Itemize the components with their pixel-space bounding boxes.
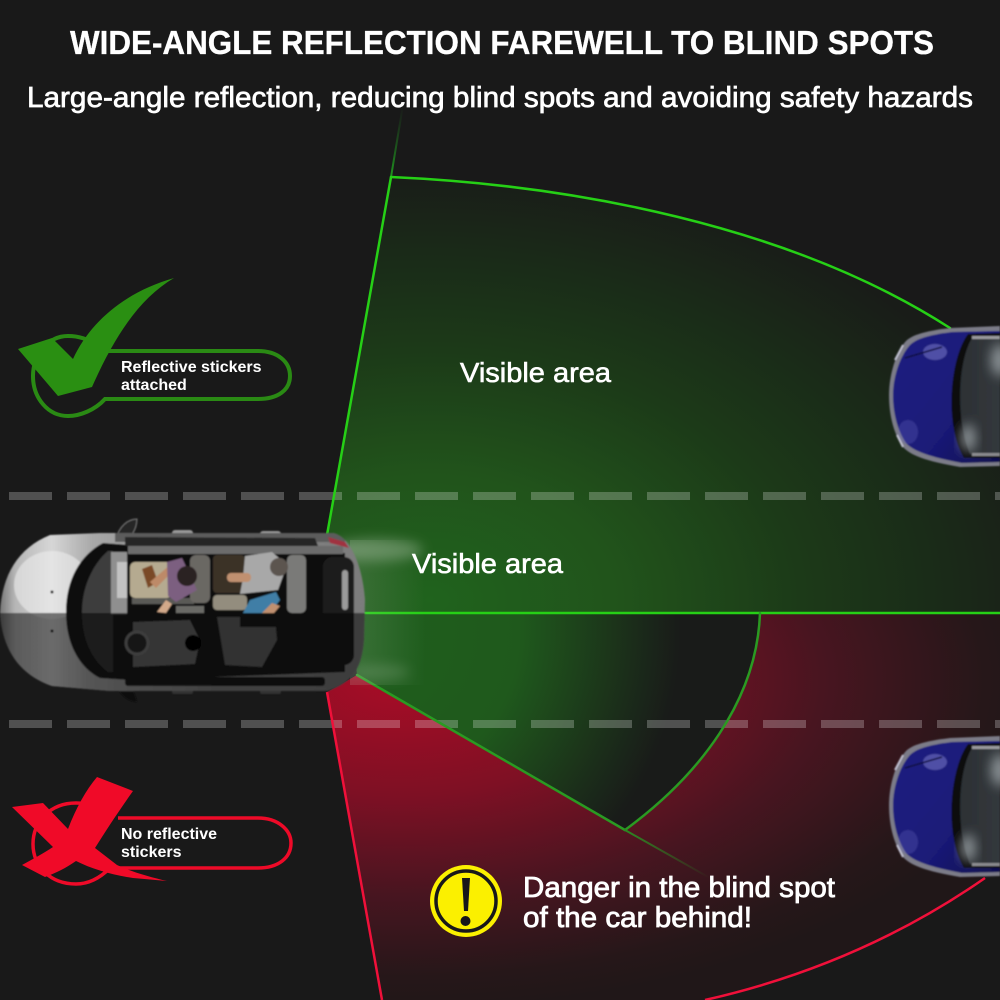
lower half figures [133, 620, 200, 667]
blind spot: red sector [327, 613, 1000, 1000]
blue car, upper right [889, 326, 1000, 467]
danger message: of the car behind! [523, 902, 752, 934]
front seat and passenger [130, 562, 172, 598]
danger message [523, 872, 835, 934]
subtitle: Large-angle reflection, reducing blind spots and avoiding safety hazards [27, 82, 973, 114]
rear window [323, 557, 354, 665]
badge label: attached [121, 377, 187, 394]
pill outline [33, 336, 290, 416]
pill outline [33, 803, 291, 884]
title: WIDE-ANGLE REFLECTION FAREWELL TO BLIND SPOTS [70, 24, 934, 61]
headlight glow behind the car [327, 539, 425, 685]
car mirrors [115, 519, 281, 702]
icon: green check mark [18, 278, 174, 396]
blue car, lower right [889, 736, 1000, 877]
rear seat and passenger [213, 555, 245, 593]
badge label: Reflective stickers [121, 359, 262, 376]
badge: reflective stickers attached [18, 278, 290, 416]
label: visible area, lower: Visible area [412, 548, 563, 579]
windscreen and cabin [66, 543, 345, 680]
red boundary lines [327, 692, 985, 1000]
icon: red cross mark [12, 777, 167, 881]
side rails [115, 533, 345, 542]
lower half shade [0, 613, 370, 698]
danger message: Danger in the blind spot [523, 872, 835, 904]
badge label: stickers [121, 844, 182, 861]
car seen from above [0, 519, 370, 702]
label: visible area, upper: Visible area [460, 357, 611, 388]
visible area: green sector [327, 177, 1000, 830]
green boundary lines [327, 105, 1000, 878]
icon: yellow warning circle [430, 865, 502, 937]
road lane markings [8, 496, 1000, 724]
badge label: No reflective [121, 826, 217, 843]
badge: no reflective stickers [12, 777, 291, 884]
car body [0, 530, 370, 698]
